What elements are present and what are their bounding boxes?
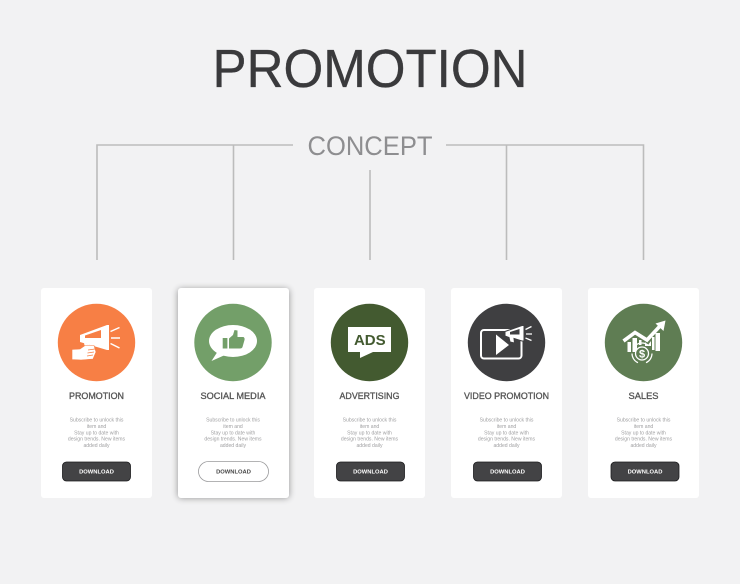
button	[198, 462, 268, 482]
icon: ads speech bubble: ADS	[354, 332, 386, 349]
description: added daily	[356, 443, 383, 449]
title: PROMOTION	[212, 39, 528, 99]
label: SOCIAL MEDIA	[200, 391, 266, 401]
panel: advertising	[314, 288, 425, 498]
connector lines	[97, 145, 644, 260]
description: Stay up to date with	[211, 430, 256, 436]
icon: ads speech bubble	[331, 304, 408, 381]
label: ADVERTISING	[340, 391, 400, 401]
label: SALES	[628, 391, 659, 401]
icon: rising chart with dollar coin	[605, 304, 682, 381]
description	[204, 418, 262, 449]
icon: speech bubble with thumb	[194, 304, 272, 381]
button	[474, 462, 542, 481]
description: Subscribe to unlock this	[343, 418, 397, 424]
button	[336, 462, 404, 481]
description: Subscribe to unlock this	[617, 418, 671, 424]
panel: sales	[588, 288, 699, 498]
description: Stay up to date with	[74, 430, 119, 436]
panel: video promotion	[451, 288, 562, 498]
description: added daily	[220, 443, 246, 449]
description: design trends. New items	[341, 437, 399, 443]
description: Subscribe to unlock this	[480, 418, 534, 424]
description: design trends. New items	[68, 437, 126, 443]
description: Stay up to date with	[621, 430, 666, 436]
button: DOWNLOAD	[490, 470, 525, 476]
description	[68, 418, 126, 449]
icon: megaphone in hand	[58, 304, 135, 381]
description: design trends. New items	[204, 437, 262, 443]
description: Subscribe to unlock this	[206, 418, 260, 424]
description: item and	[360, 424, 379, 430]
description: item and	[87, 424, 106, 430]
description: added daily	[83, 443, 110, 449]
panel: promotion	[41, 288, 152, 498]
panel: social media	[178, 288, 289, 498]
description: added daily	[630, 443, 657, 449]
button	[62, 462, 130, 481]
button: DOWNLOAD	[628, 470, 662, 476]
description: item and	[223, 424, 243, 430]
button: DOWNLOAD	[353, 470, 388, 476]
description	[341, 418, 399, 449]
icon: video player with megaphone	[468, 304, 545, 381]
description: item and	[634, 424, 653, 430]
label: VIDEO PROMOTION	[464, 391, 549, 401]
subtitle: concept: CONCEPT	[308, 131, 432, 161]
button: DOWNLOAD	[216, 470, 251, 476]
description	[615, 418, 673, 449]
icon: rising chart with dollar coin: $	[639, 348, 645, 360]
description: design trends. New items	[478, 437, 536, 443]
description: item and	[497, 424, 516, 430]
label: PROMOTION	[69, 391, 124, 401]
button: DOWNLOAD	[79, 470, 114, 476]
description: Stay up to date with	[347, 430, 392, 436]
button	[611, 462, 679, 481]
description: Subscribe to unlock this	[70, 418, 124, 424]
description	[478, 418, 536, 449]
description: added daily	[493, 443, 520, 449]
description: design trends. New items	[615, 437, 673, 443]
description: Stay up to date with	[484, 430, 529, 436]
